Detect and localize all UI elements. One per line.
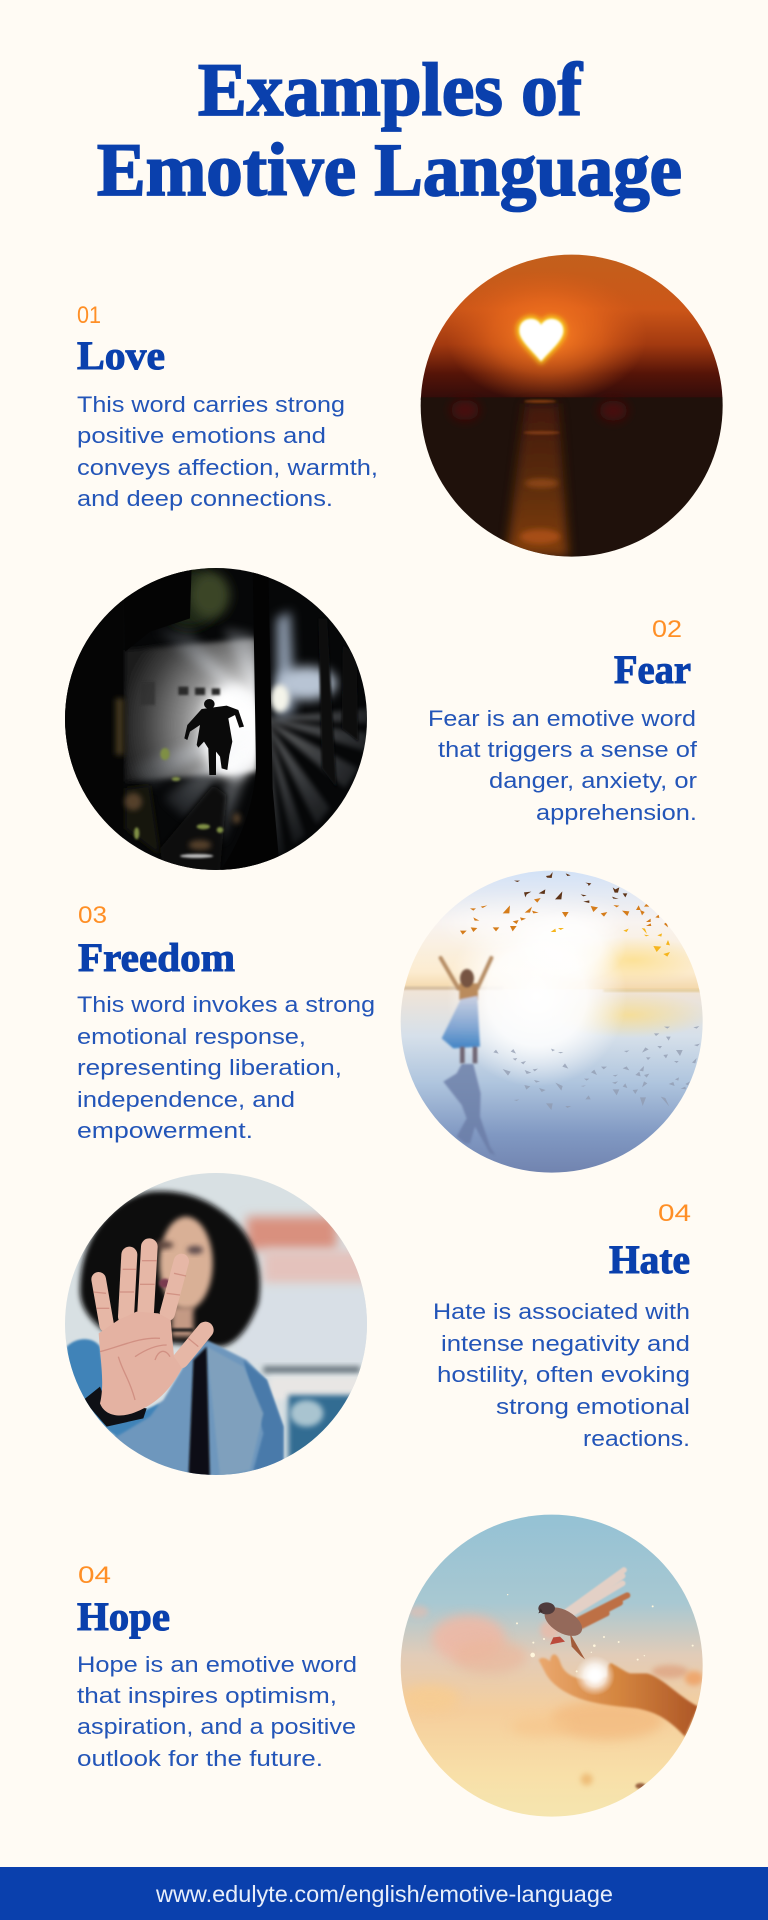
footer URL: www.edulyte.com/english/emotive-language	[155, 1881, 613, 1907]
body text: freedom: empowerment.	[77, 1118, 253, 1143]
body text: hate: hostility, often evoking	[437, 1362, 690, 1387]
body text: hate	[433, 1299, 690, 1451]
body text: love	[77, 392, 378, 511]
body text: hate: intense negativity and	[441, 1331, 690, 1356]
panel: fear	[60, 565, 698, 875]
body text: fear	[428, 706, 698, 825]
title: Emotive Language	[97, 129, 682, 212]
title	[97, 49, 682, 212]
heading: Hope: Hope	[77, 1594, 170, 1639]
photo: woman with raised arms and birds at sunset	[397, 867, 710, 1176]
footer bar	[0, 1867, 768, 1920]
body text: freedom: representing liberation,	[77, 1055, 342, 1080]
panel: freedom	[77, 867, 710, 1176]
body text: freedom: This word invokes a strong	[77, 992, 375, 1017]
body text: freedom: independence, and	[77, 1087, 295, 1112]
body text: hate: Hate is associated with	[433, 1299, 690, 1324]
heading: Hate: Hate	[609, 1237, 690, 1282]
body text: love: positive emotions and	[77, 423, 326, 448]
number 03: 03	[78, 902, 107, 929]
photo: man silhouette running in a sunlit forest	[60, 565, 373, 875]
body text: hope	[77, 1652, 357, 1771]
body text: hope: aspiration, and a positive	[77, 1714, 356, 1739]
number 02: 02	[652, 616, 682, 643]
photo: woman holding up a hand in a stop gesture	[60, 1170, 375, 1480]
heading: Fear: Fear	[614, 647, 691, 692]
body text: hope: that inspires optimism,	[77, 1683, 337, 1708]
body text: fear: danger, anxiety, or	[489, 768, 697, 793]
panel: love	[77, 253, 727, 561]
panel: hope	[77, 1510, 710, 1820]
body text: love: conveys affection, warmth,	[77, 455, 378, 480]
body text: fear: Fear is an emotive word	[428, 706, 696, 731]
body text: hope: outlook for the future.	[77, 1746, 323, 1771]
number 04: 04	[78, 1562, 111, 1589]
title: Examples of	[198, 49, 583, 132]
body text: hope: Hope is an emotive word	[77, 1652, 357, 1677]
photo: dove flying from an open hand at sunset	[397, 1510, 710, 1820]
body text: love: This word carries strong	[77, 392, 345, 417]
number 01: 01	[77, 302, 101, 329]
body text: fear: that triggers a sense of	[438, 737, 698, 762]
photo: heart-shaped sun over the sea	[417, 253, 727, 561]
body text: freedom: emotional response,	[77, 1024, 306, 1049]
panel: hate	[60, 1170, 691, 1480]
heading: Freedom: Freedom	[78, 935, 235, 980]
body text: freedom	[77, 992, 375, 1143]
body text: hate: reactions.	[583, 1426, 690, 1451]
body text: fear: apprehension.	[536, 800, 697, 825]
heading: Love: Love	[77, 333, 165, 378]
body text: hate: strong emotional	[496, 1394, 690, 1419]
number 04: 04	[658, 1200, 691, 1227]
body text: love: and deep connections.	[77, 486, 333, 511]
